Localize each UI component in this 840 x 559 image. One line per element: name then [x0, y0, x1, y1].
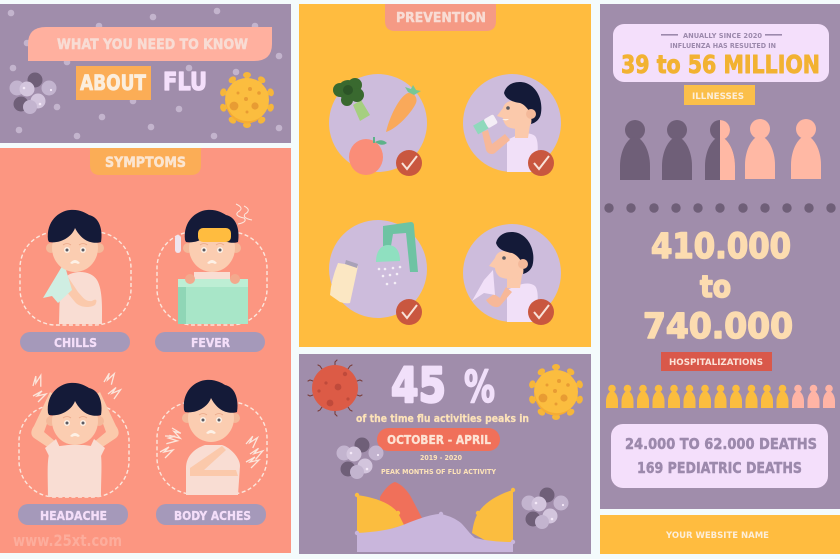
- prevention: wash hands: [329, 220, 427, 325]
- pictogram: hospitalizations: [606, 385, 835, 408]
- footer bar: YOUR WEBSITE NAME: [665, 531, 769, 541]
- illnesses callout: [613, 24, 829, 82]
- symptom: chills: [20, 210, 131, 352]
- illnesses callout: ANUALLY SINCE 2020: [683, 32, 762, 40]
- symptoms heading tab: [90, 148, 201, 175]
- hospitalizations label: [661, 352, 772, 371]
- statistic: 45 percent: %: [464, 362, 495, 413]
- footer bar: [600, 515, 840, 554]
- heading banner: [28, 27, 272, 61]
- icon: yellow virus: [528, 364, 584, 420]
- symptom: fever: FEVER: [191, 336, 230, 350]
- deaths callout: 169 PEDIATRIC DEATHS: [637, 459, 802, 477]
- symptom: body aches: [156, 380, 267, 525]
- statistic: 45 percent: [391, 358, 495, 414]
- symptom: body aches: BODY ACHES: [174, 509, 251, 523]
- about label: ABOUT: [80, 71, 147, 95]
- months pill: [377, 428, 500, 451]
- statistic: 45 percent: 45: [391, 358, 446, 414]
- prevention: cover sneeze: [463, 224, 561, 325]
- panel: peak flu activity: [299, 354, 591, 554]
- panel: about flu header: [0, 4, 291, 143]
- area chart: [355, 482, 515, 552]
- deaths callout: [611, 424, 828, 488]
- pictogram: illnesses: [620, 119, 821, 180]
- symptoms heading tab: SYMPTOMS: [105, 155, 186, 171]
- icon: red virus: [308, 360, 362, 416]
- symptom: headache: HEADACHE: [40, 509, 107, 523]
- watermark: www.25xt.com: [13, 531, 122, 550]
- hospitalizations figures: 410.000: [651, 227, 791, 267]
- icon: yellow virus: [219, 72, 275, 128]
- panel: symptoms: [0, 148, 291, 553]
- icon: cells: [522, 488, 568, 529]
- chart subtitle: PEAK MONTHS OF FLU ACTIVITY: [381, 468, 497, 476]
- prevention: healthy food: [329, 74, 427, 176]
- heading banner: WHAT YOU NEED TO KNOW: [57, 37, 248, 53]
- hospitalizations label: HOSPITALIZATIONS: [669, 358, 763, 368]
- caption: of the time flu activities peaks in: [356, 412, 529, 425]
- prevention heading tab: PREVENTION: [396, 11, 486, 26]
- deaths callout: 24.000 TO 62.000 DEATHS: [625, 435, 817, 453]
- illnesses label: [684, 85, 755, 105]
- symptom: fever: [155, 204, 267, 352]
- symptom: chills: CHILLS: [54, 336, 97, 350]
- hospitalizations figures: [643, 227, 793, 347]
- illnesses label: ILLNESSES: [692, 92, 744, 102]
- panel: flu statistics: [600, 4, 840, 509]
- symptom: headache: [18, 371, 129, 525]
- hospitalizations figures: to: [700, 270, 731, 305]
- prevention: drink water: [463, 74, 561, 176]
- hospitalizations figures: 740.000: [643, 307, 793, 347]
- icon: cells: [10, 72, 56, 114]
- about label: [76, 66, 151, 100]
- illnesses callout: INFLUENZA HAS RESULTED IN: [670, 42, 776, 50]
- icon: cells: [336, 438, 384, 479]
- panel: prevention: [299, 4, 591, 347]
- months pill: OCTOBER - APRIL: [387, 433, 491, 447]
- flu word: FLU: [163, 67, 207, 96]
- prevention heading tab: [385, 4, 496, 31]
- years: 2019 - 2020: [420, 454, 462, 462]
